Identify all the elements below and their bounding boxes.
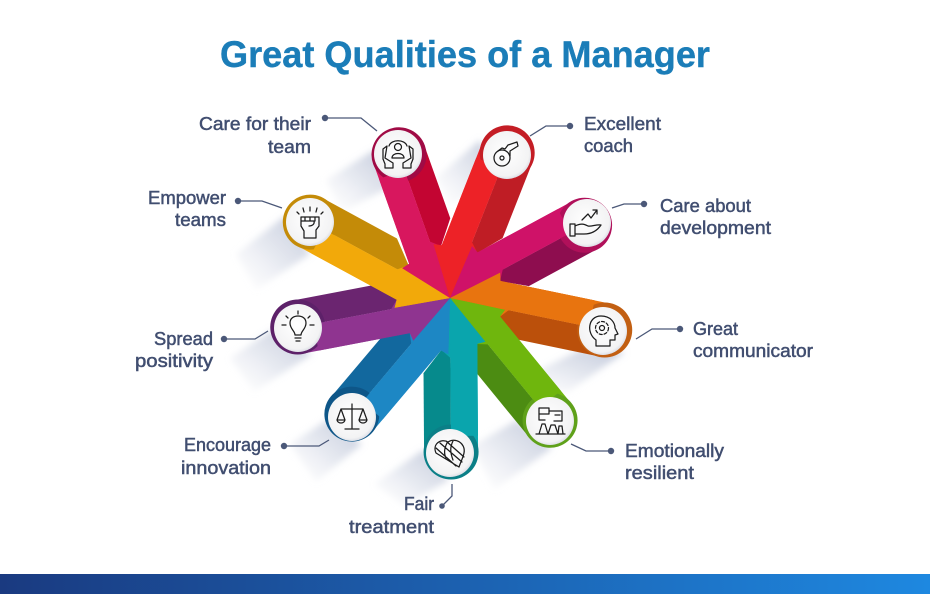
label: encourage innovation: Encourage <box>184 434 271 455</box>
arrow: blue <box>307 275 477 458</box>
title: Great Qualities of a Manager <box>220 34 710 75</box>
label: excellent coach: coach <box>584 135 633 156</box>
label: care for their team <box>199 113 377 157</box>
label: fair treatment: Fair <box>404 493 434 514</box>
label: care for their team: Care for their <box>199 113 311 134</box>
icon: balance scale <box>328 393 376 441</box>
arrow: yellow <box>269 178 467 329</box>
label: excellent coach <box>530 113 661 156</box>
arrow: teal <box>415 298 486 480</box>
arrow: red <box>417 114 550 311</box>
label: emotionally resilient: resilient <box>625 462 694 483</box>
label: emotionally resilient <box>571 440 725 483</box>
label: fair treatment: treatment <box>349 516 434 537</box>
label: care for their team: team <box>268 136 311 157</box>
label: emotionally resilient: Emotionally <box>625 440 725 461</box>
label: empower teams: teams <box>175 209 226 230</box>
arrow: orange <box>443 264 639 370</box>
arrow: crimson <box>357 117 483 310</box>
label: great communicator: communicator <box>693 340 813 361</box>
label: excellent coach: Excellent <box>584 113 661 134</box>
label: empower teams: Empower <box>148 187 226 208</box>
label: great communicator: Great <box>693 318 738 339</box>
label: encourage innovation: innovation <box>181 457 271 478</box>
label: care about development <box>612 195 771 238</box>
footer bar <box>0 574 930 594</box>
label: encourage innovation <box>181 434 329 478</box>
label: spread positivity: Spread <box>154 328 213 349</box>
label: care about development: development <box>660 217 771 238</box>
label: great communicator <box>636 318 813 361</box>
icon: heart ball <box>426 429 474 477</box>
arrow: magenta <box>433 181 625 329</box>
label: empower teams <box>148 187 282 230</box>
icon: people in hands <box>374 130 422 178</box>
arrow: purple <box>264 264 457 367</box>
icon: whistle <box>483 131 531 179</box>
label: spread positivity <box>135 328 268 371</box>
icon: growth in hand <box>563 199 611 247</box>
label: fair treatment <box>349 484 452 537</box>
label: care about development: Care about <box>660 195 751 216</box>
arrow: green <box>423 276 595 464</box>
icon: raised fist <box>286 198 334 246</box>
icon: people at screen <box>526 397 574 445</box>
icon: head with gear <box>579 307 627 355</box>
icon: light bulb <box>274 304 322 352</box>
label: spread positivity: positivity <box>135 350 214 371</box>
